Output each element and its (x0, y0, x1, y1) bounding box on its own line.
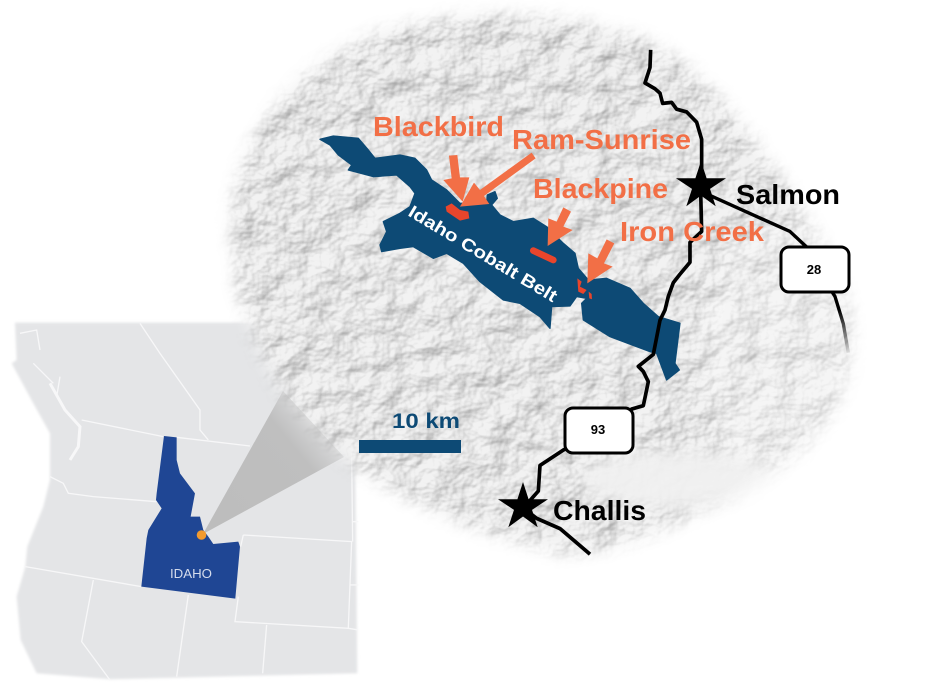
highway shield 93: 93 (591, 422, 605, 437)
terrain relief (200, 0, 880, 570)
Idaho label: IDAHO (170, 567, 212, 581)
arrow: Blackbird (443, 155, 469, 202)
arrows (443, 153, 614, 283)
deposit markers (446, 203, 592, 299)
highway shield 93 (565, 408, 633, 453)
arrow: Iron Creek (587, 239, 614, 283)
label: Blackbird: Blackbird (373, 111, 504, 142)
inset borders (20, 323, 358, 680)
inset Idaho state (141, 436, 240, 599)
zoom wedge (203, 391, 344, 534)
Idaho Cobalt Belt region (320, 136, 680, 380)
label: Iron Creek: Iron Creek (620, 216, 764, 247)
scale bar: 10 km (392, 410, 460, 433)
label: Ram-Sunrise: Ram-Sunrise (512, 124, 691, 155)
highway roads (523, 50, 848, 554)
city label: Challis: Challis (553, 495, 646, 526)
inset map: western North America (12, 323, 358, 680)
scale bar (359, 410, 461, 453)
city label: Salmon: Salmon (736, 179, 840, 210)
highway shield 28 (781, 247, 849, 292)
road 28 (707, 194, 848, 353)
label: Blackpine: Blackpine (533, 173, 668, 204)
highway shield 28: 28 (807, 262, 821, 277)
arrow: Ram-Sunrise (460, 153, 536, 207)
star: Salmon (676, 161, 726, 206)
Idaho shape (141, 436, 240, 599)
road 93 (523, 50, 702, 554)
arrow: Blackpine (548, 207, 573, 246)
inset land (12, 323, 357, 679)
location dot (197, 530, 206, 540)
belt label: Idaho Cobalt Belt (405, 201, 561, 306)
deposit labels (373, 111, 764, 247)
star: Challis (498, 482, 548, 527)
